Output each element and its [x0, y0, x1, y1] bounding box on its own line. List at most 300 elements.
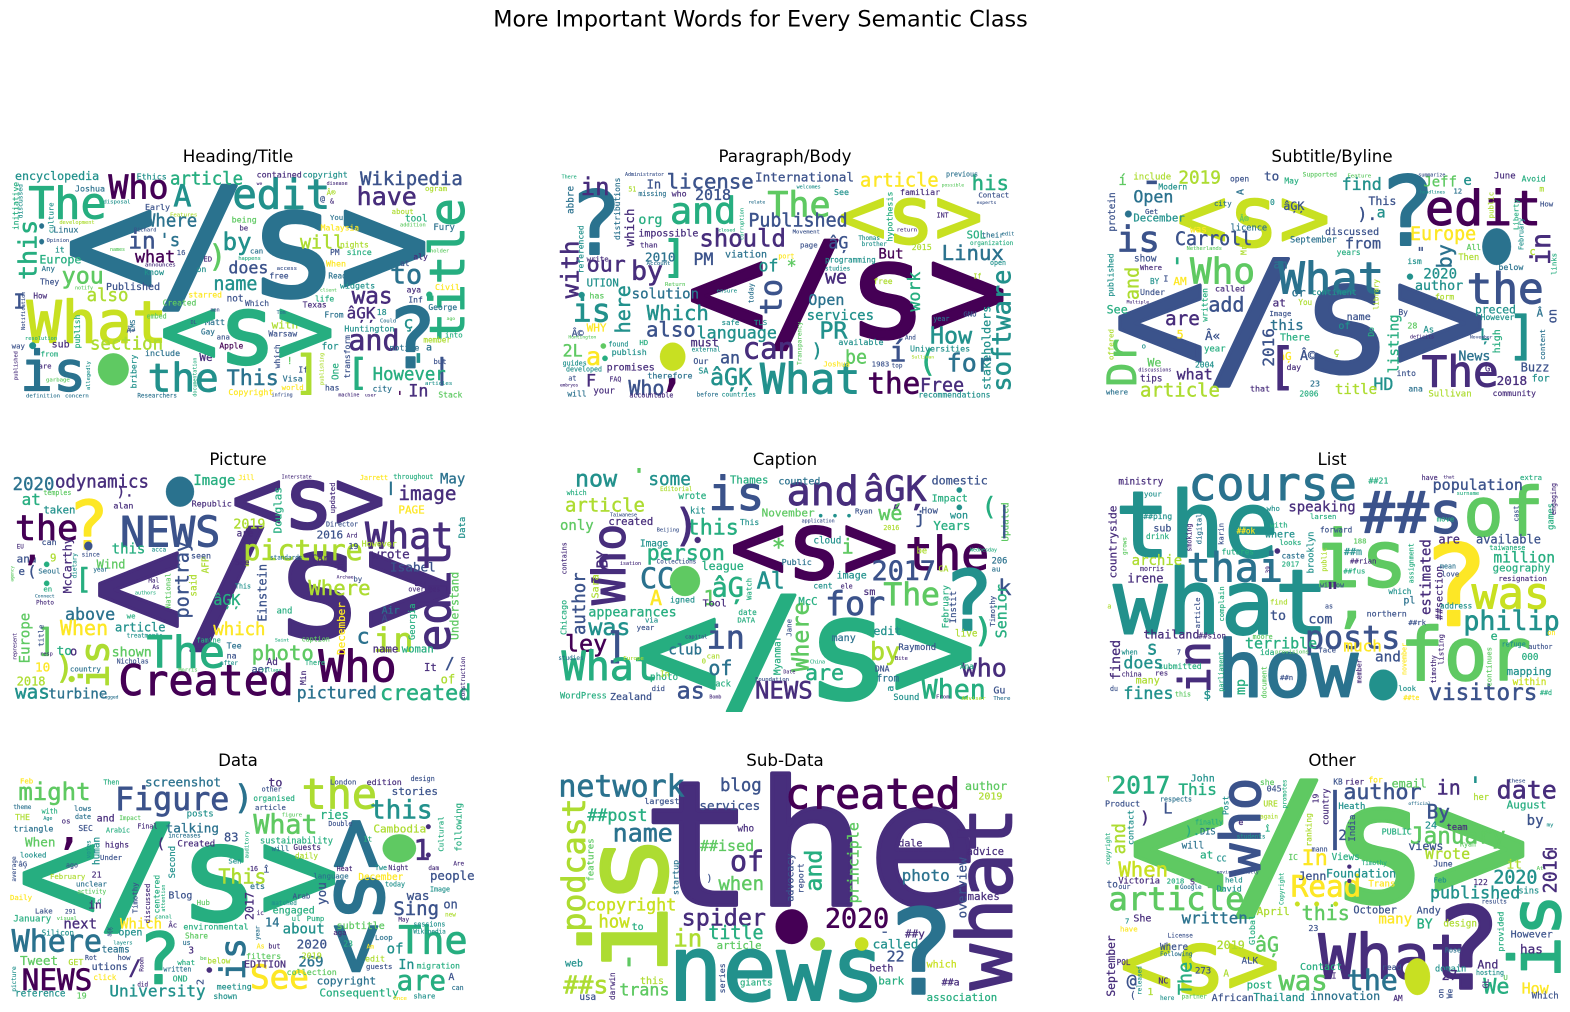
word cloud: Other: GL — [1481, 979, 1490, 988]
word cloud: Other: CC — [1217, 854, 1227, 864]
word cloud: Data: matched — [272, 900, 297, 907]
word cloud: Paragraph/Body: year — [933, 315, 949, 323]
word cloud: Data: of — [387, 941, 404, 957]
word cloud: Subtitle/Byline: All — [1467, 243, 1481, 252]
word cloud: Heading/Title: We — [199, 351, 213, 364]
word cloud: Heading/Title: world — [282, 383, 304, 392]
word cloud: Paragraph/Body: brother — [862, 241, 887, 248]
word cloud: Heading/Title: have — [357, 182, 417, 211]
word cloud: Subtitle/Byline: open — [1230, 175, 1249, 184]
word cloud: Other — [1104, 748, 1570, 1012]
word cloud: List: sub — [1153, 524, 1171, 535]
word cloud: Caption: of — [708, 656, 732, 680]
word cloud: Paragraph/Body: GNU — [963, 310, 977, 319]
word cloud: Caption: McC — [798, 595, 818, 608]
word cloud: Picture: agency — [10, 566, 15, 582]
word cloud: Heading/Title: However — [373, 365, 446, 385]
word cloud: Heading/Title: name — [213, 274, 257, 295]
word cloud: Subtitle/Byline: <s> — [1177, 169, 1330, 268]
word cloud: Paragraph/Body: The — [767, 186, 831, 226]
word cloud: Paragraph/Body: âĢ — [828, 233, 848, 252]
word cloud: Picture: picture — [243, 534, 363, 567]
word cloud: Picture: Car — [312, 554, 329, 565]
word cloud: Subtitle/Byline: where — [1106, 388, 1128, 397]
word cloud: Data: Night — [388, 864, 408, 872]
word cloud: Data: January — [13, 915, 52, 925]
word cloud: Heading/Title: notice — [389, 343, 419, 353]
word cloud: Caption: From — [936, 694, 950, 700]
word cloud: Data: Under — [100, 853, 123, 862]
word cloud: Other: Read — [1291, 870, 1361, 904]
word cloud: Subtitle/Byline: continent — [1312, 287, 1357, 297]
word cloud: Data: December — [358, 872, 404, 883]
word cloud: Paragraph/Body: previous — [946, 171, 978, 179]
panel: Sub-Data — [557, 745, 1030, 1012]
word cloud: Data: / — [128, 956, 141, 981]
word cloud: List: posts — [1305, 620, 1400, 656]
word cloud: Heading/Title: Tom — [277, 310, 286, 316]
word cloud: Heading/Title: allegedly — [86, 361, 92, 390]
word cloud: Picture: wrote — [372, 546, 410, 561]
word cloud: Heading/Title: widgets — [340, 280, 375, 290]
word cloud: Paragraph/Body: hypothesis — [885, 192, 895, 242]
word cloud: Paragraph/Body: page — [800, 240, 818, 249]
word cloud: Sub-Data: ) — [707, 874, 712, 885]
word cloud: Data: Loop — [375, 933, 393, 942]
word cloud: Subtitle/Byline: You — [1298, 298, 1312, 307]
word cloud: List: 000 — [1522, 652, 1539, 663]
word cloud: Heading/Title: Malaysia — [321, 224, 359, 233]
word cloud: Subtitle/Byline: February — [1517, 218, 1525, 250]
word cloud: Data: to — [268, 776, 282, 790]
word cloud: Paragraph/Body: can — [743, 331, 795, 365]
word cloud: Subtitle/Byline: Dr — [1100, 339, 1146, 387]
word cloud: Heading/Title: How — [33, 292, 48, 301]
word cloud: Subtitle/Byline: 5 — [1177, 327, 1184, 341]
word cloud: Paragraph/Body: INT — [937, 211, 949, 219]
word cloud: Caption: Years — [933, 519, 970, 533]
word cloud: Sub-Data: when — [718, 873, 764, 895]
word cloud: Other: Google — [1180, 884, 1202, 891]
word cloud: Other: 2020 — [1493, 867, 1537, 888]
word cloud: Sub-Data: usa — [579, 992, 596, 1003]
word cloud: Other: 19 — [1311, 794, 1320, 803]
word cloud: Data: 3 — [188, 945, 194, 956]
word cloud: Picture: treatments — [127, 633, 163, 640]
word cloud: Picture: portray — [172, 541, 193, 618]
word cloud: Heading/Title: at — [400, 259, 410, 268]
word cloud: Subtitle/Byline: links — [1550, 253, 1559, 275]
word cloud: List: estimated — [1419, 539, 1435, 615]
word cloud: Picture: article — [115, 621, 166, 635]
word cloud: Data: The — [398, 918, 468, 963]
word cloud: Data: is — [214, 938, 254, 980]
word cloud: List: article — [1193, 597, 1202, 628]
word cloud: List: thailand — [1143, 627, 1199, 641]
word cloud: Picture: turbine — [48, 686, 107, 702]
word cloud: Subtitle/Byline: 2004 — [1195, 360, 1214, 369]
word cloud: Paragraph/Body: who — [672, 189, 687, 199]
word cloud: Caption: can — [707, 651, 720, 660]
word cloud: Subtitle/Byline: protein — [1107, 192, 1118, 232]
word cloud: Heading/Title: Joshua — [75, 184, 105, 194]
word cloud: List: to — [1270, 609, 1286, 624]
word cloud: Paragraph/Body: is — [573, 294, 611, 330]
word cloud: Other: provided — [1495, 912, 1505, 952]
word cloud: Sub-Data: how — [598, 913, 630, 933]
word cloud: Data: teams — [102, 944, 130, 955]
word cloud: Data: will — [272, 844, 289, 853]
word cloud: Sub-Data: advice — [967, 846, 1004, 858]
word cloud: Other: The — [1176, 962, 1197, 995]
word cloud: List: address — [1440, 601, 1472, 610]
word cloud: List: com — [1308, 612, 1332, 627]
word cloud: Heading/Title: but — [433, 357, 447, 366]
word cloud: Subtitle/Byline: published — [1106, 253, 1115, 297]
word cloud: Paragraph/Body: Joshua — [823, 360, 850, 369]
word cloud: Subtitle/Byline: ç — [1333, 347, 1339, 358]
word cloud: Picture: Archae — [337, 574, 354, 580]
word cloud: Picture: throughout — [393, 473, 433, 481]
word cloud: Paragraph/Body: experts — [977, 200, 996, 206]
word cloud: Subtitle/Byline: Under — [1140, 287, 1165, 297]
word cloud: Subtitle/Byline: c — [1529, 245, 1536, 258]
word cloud: List: mean — [1440, 562, 1456, 570]
word cloud: List: surname — [1457, 491, 1479, 497]
word cloud: Paragraph/Body: viation — [725, 249, 767, 260]
word cloud: Paragraph/Body: with — [556, 241, 584, 298]
word cloud: Caption: 2017 — [872, 556, 936, 587]
word cloud: Paragraph/Body: software — [987, 270, 1017, 392]
word cloud: Sub-Data: 22 — [887, 948, 905, 966]
word cloud: Data: Which — [120, 916, 162, 932]
word cloud: Heading/Title: One — [330, 363, 341, 380]
word cloud: Other: 045 — [1267, 784, 1282, 794]
word cloud: Data: Sen — [228, 856, 242, 865]
word cloud: Paragraph/Body: Sullivan — [912, 354, 934, 360]
word cloud: Paragraph/Body: for — [947, 349, 992, 378]
word cloud: Subtitle/Byline: September — [1290, 236, 1337, 246]
word cloud: Picture: What — [365, 514, 453, 557]
word cloud: Caption: appearances — [588, 606, 677, 621]
word cloud: List: extra — [1520, 473, 1542, 482]
word cloud: Paragraph/Body: WHY — [587, 322, 607, 335]
word cloud: Subtitle/Byline: Modern — [1158, 182, 1187, 191]
word cloud: List: ? — [1422, 522, 1489, 652]
panel: Heading/Title — [11, 147, 476, 406]
word cloud: Data: be — [200, 956, 207, 962]
word cloud: List: , — [1333, 565, 1369, 635]
word cloud: Data: auditory — [244, 830, 250, 858]
word cloud: Heading/Title: way — [12, 341, 25, 350]
word cloud: Paragraph/Body: What — [760, 354, 860, 403]
word cloud: Heading/Title: for — [322, 341, 339, 352]
word cloud: Picture: 10 — [35, 660, 50, 675]
word cloud: Other: ALK — [1242, 956, 1258, 966]
word cloud: Other: here — [1160, 995, 1175, 1002]
word cloud: Paragraph/Body: welcomes — [797, 184, 821, 190]
word cloud: Data: This — [218, 864, 266, 888]
word cloud: Picture: caption — [302, 636, 330, 644]
word cloud: Picture: resp — [40, 652, 53, 658]
word cloud: Picture: year — [93, 567, 108, 574]
word cloud: Paragraph/Body: safe — [722, 318, 739, 327]
word cloud: Caption: in — [707, 620, 745, 656]
word cloud: Subtitle/Byline: Feature — [1347, 174, 1372, 180]
word cloud: List: was — [1472, 569, 1550, 619]
word cloud: Data: Room — [138, 957, 145, 972]
word cloud: Data: OND — [173, 974, 188, 984]
word cloud: Subtitle/Byline: Buzz — [1521, 361, 1550, 375]
word cloud: Heading/Title: ] — [293, 346, 321, 400]
word cloud: Caption: by — [870, 637, 900, 666]
word cloud: List: ##s — [1361, 480, 1463, 546]
word cloud: Sub-Data: and — [800, 850, 828, 892]
word cloud: Subtitle/Byline: at — [1273, 297, 1286, 310]
word cloud: Paragraph/Body: âĢĶ — [710, 363, 752, 391]
word cloud: List: mp — [1234, 679, 1249, 695]
word cloud: List: in — [1171, 641, 1221, 693]
word cloud: Caption: date — [738, 608, 757, 617]
word cloud: Sub-Data: trans — [619, 981, 669, 1000]
word cloud: Data: meeting — [217, 981, 252, 991]
word cloud: Caption: photo — [650, 672, 678, 683]
word cloud: List: does — [1123, 653, 1163, 672]
word cloud: List: how — [1217, 625, 1359, 716]
word cloud: Subtitle/Byline: What — [1278, 253, 1384, 304]
word cloud: Paragraph/Body: article — [860, 171, 939, 192]
word cloud: Subtitle/Byline: News — [1458, 350, 1490, 365]
word cloud: Data: Created — [177, 840, 215, 850]
word cloud: Other: 1 — [1147, 987, 1153, 998]
word cloud: Data: engaged — [273, 905, 315, 916]
word cloud: Caption: ( — [982, 492, 997, 521]
word cloud: Data: Are — [453, 861, 465, 868]
word cloud: Data: 2017 — [242, 892, 256, 920]
word cloud: Data: ets — [250, 881, 265, 891]
word cloud: Sub-Data: overview — [955, 857, 970, 918]
word cloud: Other: environmentally — [1217, 869, 1259, 875]
word cloud: Caption: Jane — [785, 619, 794, 637]
word cloud: Caption: wrote — [678, 491, 707, 502]
word cloud: Sub-Data: title — [708, 923, 764, 944]
word cloud: Caption: Ryan — [855, 506, 873, 515]
word cloud: Heading/Title: Â» — [127, 326, 135, 335]
word cloud: Subtitle/Byline: ' — [1170, 253, 1184, 281]
word cloud: Data: written — [163, 966, 191, 974]
word cloud: Paragraph/Body: Contact — [978, 190, 1009, 199]
word cloud: Heading/Title: George — [428, 303, 457, 312]
word cloud: Subtitle/Byline: âĢĶ — [1283, 199, 1304, 214]
word cloud: Caption: article — [565, 495, 645, 517]
word cloud: Heading/Title: Visa — [283, 374, 303, 384]
word cloud: Caption: Zealand — [610, 692, 652, 703]
word cloud: Heading/Title: 's — [159, 231, 180, 251]
word cloud: Data: Am — [367, 943, 374, 950]
word cloud: Heading/Title: happens — [238, 256, 261, 262]
word cloud: Other: April — [1257, 905, 1290, 918]
word cloud: Paragraph/Body: open — [990, 259, 1006, 267]
word cloud: Data: us — [183, 939, 191, 947]
word cloud: Data: Rot — [85, 954, 97, 962]
word cloud: Caption: Europe — [623, 656, 644, 662]
word cloud: Caption: cloud — [813, 535, 841, 546]
word cloud: Data: sustainability — [260, 836, 333, 846]
word cloud: Subtitle/Byline: the — [1467, 264, 1544, 314]
word cloud: Data: Consequently — [319, 987, 399, 1000]
word cloud: Picture: the — [15, 509, 78, 549]
word cloud: Subtitle/Byline: I — [1163, 274, 1168, 284]
word cloud: Picture: When — [60, 616, 108, 640]
word cloud: Subtitle/Byline: 2020 — [1423, 266, 1457, 282]
word cloud: Data: 2020 — [297, 936, 327, 951]
word cloud: Data: 291 — [65, 908, 76, 915]
word cloud: Sub-Data: name — [613, 819, 673, 848]
word cloud: List: million — [1493, 549, 1555, 566]
word cloud: List: larsen — [1310, 512, 1336, 521]
word cloud: Caption: i — [842, 534, 854, 558]
word cloud: List: futures — [1222, 547, 1254, 556]
word cloud: Data: 83 — [224, 831, 238, 845]
word cloud: Heading/Title: copyright — [303, 170, 348, 180]
word cloud: Picture: However — [362, 539, 397, 549]
word cloud: Other: date — [1497, 775, 1557, 804]
word cloud: List: move — [1437, 515, 1454, 524]
word cloud: Caption: 1 — [703, 586, 716, 610]
word cloud: Data: GET — [68, 957, 83, 967]
word cloud: Paragraph/Body: we — [825, 267, 847, 288]
word cloud: Data: language — [313, 871, 349, 880]
word cloud: Data: picture — [11, 966, 18, 992]
word cloud: Other: has — [1520, 941, 1543, 956]
word cloud: List: this — [1175, 691, 1191, 699]
word cloud: Subtitle/Byline: city — [1214, 199, 1232, 208]
word cloud: Caption: isation — [620, 561, 641, 567]
word cloud: Data: subtitle — [337, 921, 385, 932]
word cloud: List: ##ping — [1143, 512, 1172, 521]
word cloud: Data: shown — [213, 992, 238, 1001]
word cloud: Heading/Title: initiative — [11, 182, 20, 230]
word cloud: Data: <s> — [302, 817, 404, 975]
word cloud: Caption: * — [772, 533, 786, 561]
word cloud: List: ##fus — [1343, 566, 1365, 575]
word cloud: Data: See — [250, 958, 309, 996]
word cloud: List: timothy — [1430, 655, 1438, 683]
word cloud: Paragraph/Body: than — [640, 240, 658, 249]
word cloud: Other: 122 — [1473, 878, 1488, 887]
word cloud: Sub-Data: makes — [968, 890, 1000, 903]
word cloud: Subtitle/Byline: listing — [1386, 314, 1402, 373]
word cloud: Data: design — [411, 775, 435, 783]
word cloud: Subtitle/Byline: title — [1335, 382, 1377, 398]
word cloud: Sub-Data: what — [941, 807, 1030, 990]
word cloud: Subtitle/Byline: headlines — [1420, 189, 1445, 195]
word cloud: Data: are — [397, 966, 446, 997]
word cloud: Caption: did — [652, 684, 665, 693]
word cloud: List: ##rk — [1408, 618, 1427, 627]
word cloud: Picture: Jill — [238, 474, 254, 482]
word cloud: Paragraph/Body: ? — [569, 173, 622, 275]
word cloud: Sub-Data: startup — [670, 860, 680, 895]
word cloud: List: ##sion — [1198, 631, 1226, 640]
word cloud: Paragraph/Body: recommendations — [918, 390, 991, 399]
word cloud: Sub-Data: ' — [620, 953, 638, 988]
word cloud: Heading/Title: include — [145, 348, 180, 358]
word cloud: Other: my — [1547, 823, 1554, 829]
word cloud: Subtitle/Byline: </s> — [1113, 228, 1487, 409]
word cloud: Other: to — [1107, 880, 1118, 891]
word cloud: Paragraph/Body: ( — [918, 345, 936, 380]
word cloud: List: terrible — [1245, 634, 1317, 652]
word cloud: Data: SEC — [78, 824, 93, 833]
word cloud: Data: February — [50, 872, 86, 881]
word cloud: Other: Wrote — [1425, 845, 1470, 863]
word cloud: Picture: this — [112, 541, 145, 557]
word cloud: Picture: Director — [326, 521, 358, 529]
word cloud: Caption: Updated — [1000, 502, 1011, 542]
word cloud: List: are — [1438, 532, 1460, 546]
word cloud: Caption: kit — [690, 506, 706, 516]
word cloud: Data: When — [25, 835, 55, 850]
word cloud: Subtitle/Byline: 2006 — [1299, 390, 1319, 399]
word cloud: Other: partner — [1182, 993, 1207, 1000]
word cloud: Paragraph/Body: Free — [920, 376, 964, 397]
word cloud: Heading/Title: announces — [145, 263, 176, 269]
word cloud: Other: students — [1237, 833, 1266, 840]
word cloud: Other: read — [1382, 962, 1402, 972]
word cloud: Picture: Why — [336, 556, 345, 570]
word cloud: Caption: Adviser — [962, 696, 986, 702]
word cloud: Paragraph/Body: Movement — [793, 229, 820, 235]
word cloud: Paragraph/Body: license — [667, 169, 754, 193]
word cloud: Data: Sing — [393, 898, 439, 920]
word cloud: Paragraph/Body: distributions — [613, 177, 622, 240]
word cloud: Other: 23 — [1308, 923, 1318, 933]
word cloud: Paragraph/Body: PR — [819, 316, 848, 344]
word cloud: Paragraph/Body — [556, 169, 1017, 403]
word cloud: Heading/Title: Texas — [303, 300, 327, 309]
word cloud: Data: filters — [246, 951, 281, 961]
word cloud: Sub-Data: ##s — [563, 970, 608, 999]
word cloud: Paragraph/Body: before — [697, 392, 719, 399]
word cloud: Picture: are — [237, 529, 254, 540]
word cloud: Paragraph/Body: ) — [812, 341, 823, 362]
word cloud: Heading/Title: discussed — [18, 184, 25, 218]
word cloud: Other: A — [1223, 969, 1229, 980]
word cloud: Subtitle/Byline: show — [1134, 254, 1157, 265]
word cloud: Sub-Data: services — [699, 798, 760, 813]
word cloud: List: assignment — [1407, 543, 1415, 583]
word cloud: Heading/Title: Civil — [435, 282, 460, 292]
word cloud: Data: ) — [233, 777, 253, 816]
word cloud: Paragraph/Body: Published — [748, 211, 848, 232]
word cloud: Heading/Title: definition — [26, 394, 60, 400]
word cloud: Sub-Data: in — [673, 925, 702, 953]
word cloud: List: for — [1400, 614, 1531, 698]
word cloud: Heading/Title: <s> — [160, 273, 335, 386]
word cloud: Subtitle/Byline: this — [1270, 318, 1304, 334]
word cloud: Subtitle/Byline: community — [1493, 389, 1536, 398]
word cloud: Heading/Title: will — [300, 232, 344, 253]
word cloud: Subtitle/Byline: ] — [1507, 306, 1538, 366]
word cloud: List: the — [1115, 474, 1279, 579]
word cloud: Heading/Title: and — [348, 324, 400, 357]
word cloud: Picture: construction — [460, 656, 467, 700]
word cloud: List: 2017 — [1282, 560, 1299, 569]
word cloud: Picture: title — [36, 625, 45, 647]
word cloud: Heading/Title: concern — [65, 393, 89, 399]
word cloud: Data: talking — [166, 820, 219, 835]
